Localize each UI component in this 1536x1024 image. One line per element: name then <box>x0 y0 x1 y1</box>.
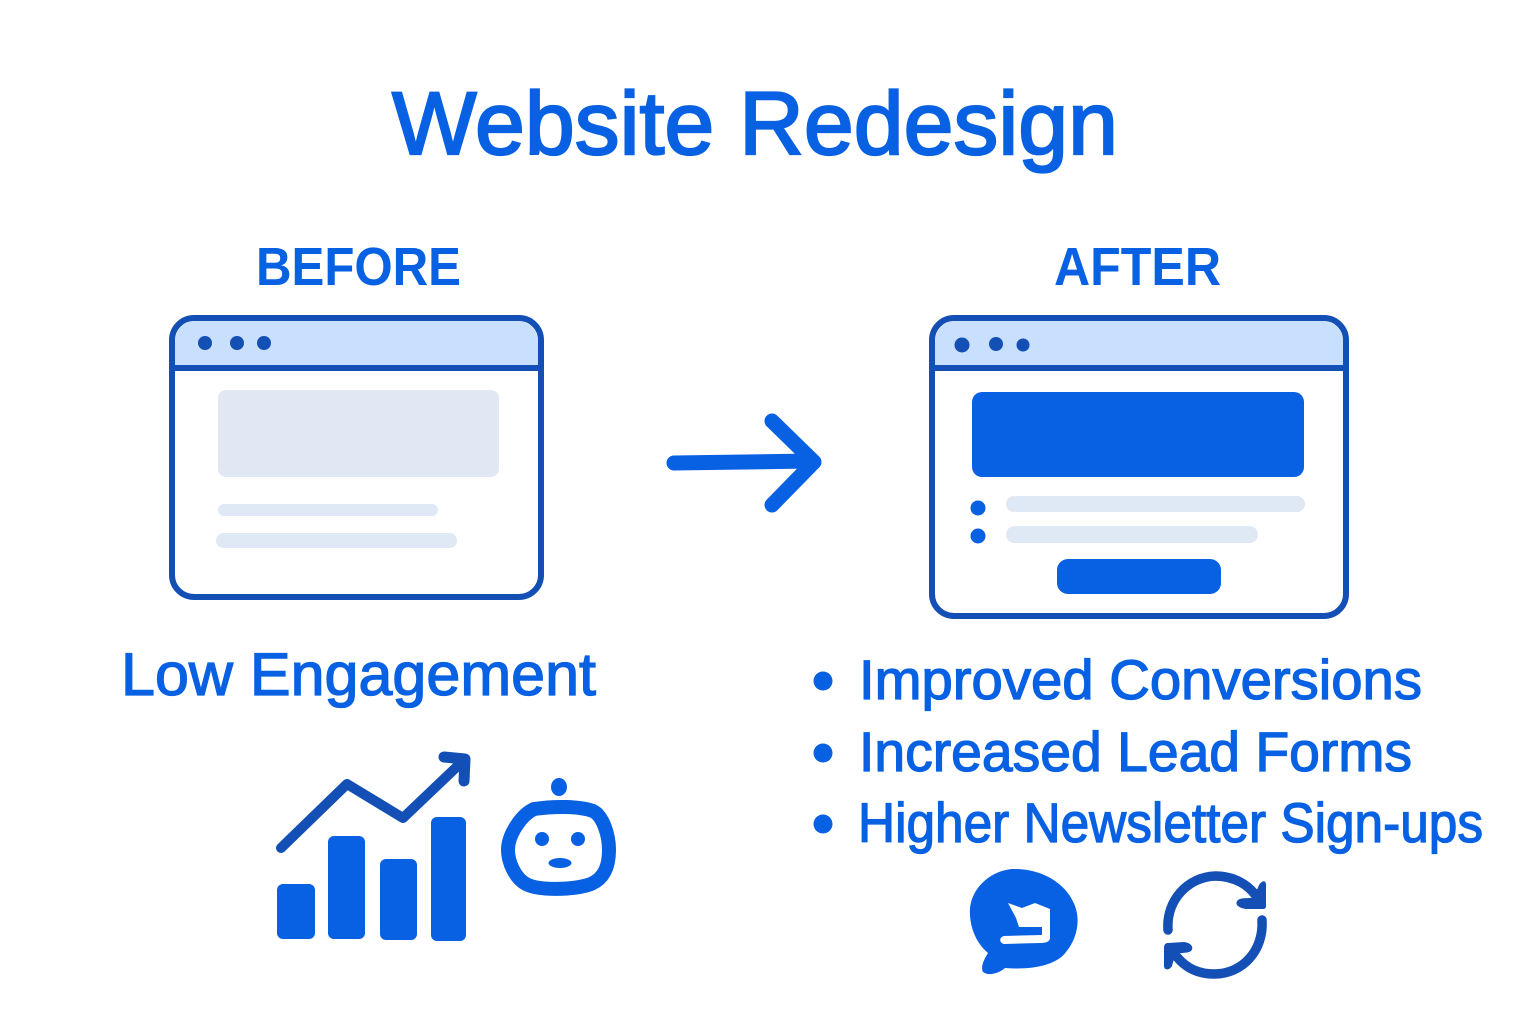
before text line 1 <box>218 504 438 516</box>
after title bar divider <box>932 365 1346 371</box>
heading: after: AFTER <box>1054 237 1221 297</box>
panel: after browser window <box>932 318 1346 616</box>
bubble <box>970 869 1078 974</box>
item: increased lead forms: Increased Lead Forms <box>859 720 1412 783</box>
before text line 2 <box>216 533 457 548</box>
eyes <box>535 832 585 846</box>
icon: refresh arrows <box>1164 876 1266 974</box>
icon: bar chart with trend arrow <box>277 757 466 941</box>
title: Website Redesign <box>392 73 1118 173</box>
bullet 2 <box>814 744 832 762</box>
bullet 3 <box>814 814 832 834</box>
trend arrow <box>281 757 465 848</box>
mouth <box>548 858 572 868</box>
head <box>508 807 609 889</box>
after window dots <box>954 337 1030 352</box>
list: improvements <box>814 648 1483 854</box>
after text line 2 <box>1006 526 1258 543</box>
item: improved conversions: Improved Conversions <box>859 648 1422 711</box>
caption: low engagement: Low Engagement <box>121 641 596 708</box>
bubble glyph <box>1000 903 1050 944</box>
arcs <box>1168 876 1262 974</box>
before title bar <box>175 321 538 367</box>
after text line 1 <box>1006 496 1305 512</box>
arrow: before to after <box>674 421 814 505</box>
icon: robot face <box>508 778 609 889</box>
antenna <box>551 778 567 796</box>
after call-to-action button <box>1057 559 1221 594</box>
upper arrowhead <box>1236 881 1266 909</box>
before title bar divider <box>172 365 541 371</box>
after title bar <box>935 321 1343 365</box>
lower arrowhead <box>1164 942 1192 969</box>
before window frame <box>172 318 541 597</box>
bars <box>277 817 466 941</box>
heading: before: BEFORE <box>256 237 461 297</box>
before window dots <box>198 336 271 350</box>
bullet 1 <box>814 672 832 690</box>
after window frame <box>932 318 1346 616</box>
after bullet dots <box>970 500 986 544</box>
icon: chat bubble <box>970 869 1078 974</box>
panel: before browser window <box>172 318 541 597</box>
item: higher newsletter sign-ups: Higher Newsletter Sign-ups <box>858 791 1483 854</box>
before hero placeholder <box>218 390 499 477</box>
after hero block <box>972 392 1304 477</box>
